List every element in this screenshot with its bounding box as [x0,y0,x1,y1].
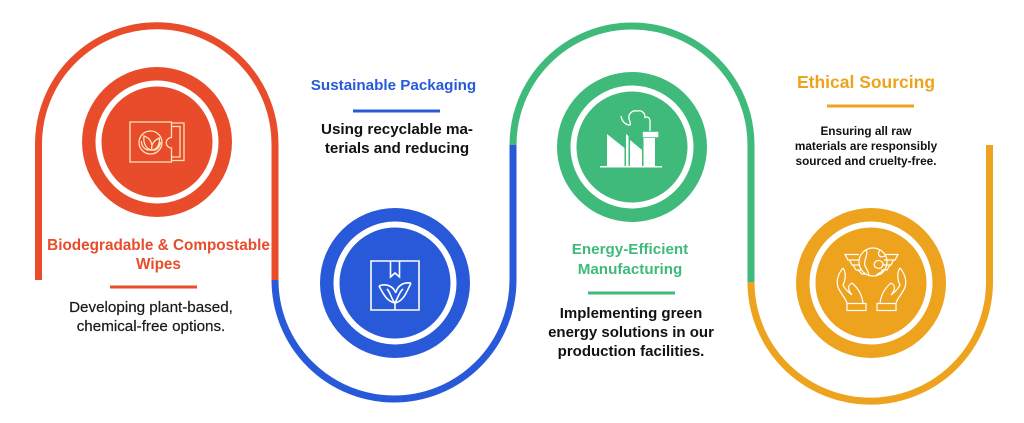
badge: red wipes icon [82,67,232,217]
heading: biodegradable [47,236,270,272]
badge: green factory icon [557,72,707,222]
path: blue arch [275,145,513,399]
text: packaging description [321,120,473,156]
text: packaging description: Using recyclable ma- [321,120,473,138]
heading: energy-efficient [572,241,688,278]
text: packaging description: terials and reducing [325,140,469,156]
text: biodegradable description [69,299,233,335]
badge: blue packaging icon [320,208,470,358]
divider: red [110,286,197,288]
text: biodegradable description: chemical-free options. [77,318,225,335]
text: ethical description [795,124,938,168]
divider: blue [353,110,440,112]
heading: biodegradable: Wipes [136,256,181,272]
heading: biodegradable: Biodegradable & Compostable [47,236,270,254]
badge: orange hands and globe icon [796,208,946,358]
heading: energy-efficient: Energy-Efficient [572,241,688,258]
text: energy description: Implementing green [560,304,702,322]
path: orange arch [751,145,990,401]
path: red arch [38,26,275,280]
divider: green [588,292,675,294]
text: energy description [548,304,714,360]
heading: ethical sourcing: Ethical Sourcing [797,72,935,92]
text: biodegradable description: Developing plant-based, [69,299,233,316]
text: energy description: production facilities. [558,342,704,360]
path: green arch [513,26,751,282]
text: energy description: energy solutions in our [548,324,714,340]
heading: energy-efficient: Manufacturing [578,260,682,278]
text: ethical description: sourced and cruelty-free. [796,154,936,168]
divider: orange [827,104,914,108]
heading: sustainable packaging: Sustainable Packaging [311,77,476,94]
text: ethical description: Ensuring all raw [820,124,912,138]
text: ethical description: materials are responsibly [795,138,937,152]
